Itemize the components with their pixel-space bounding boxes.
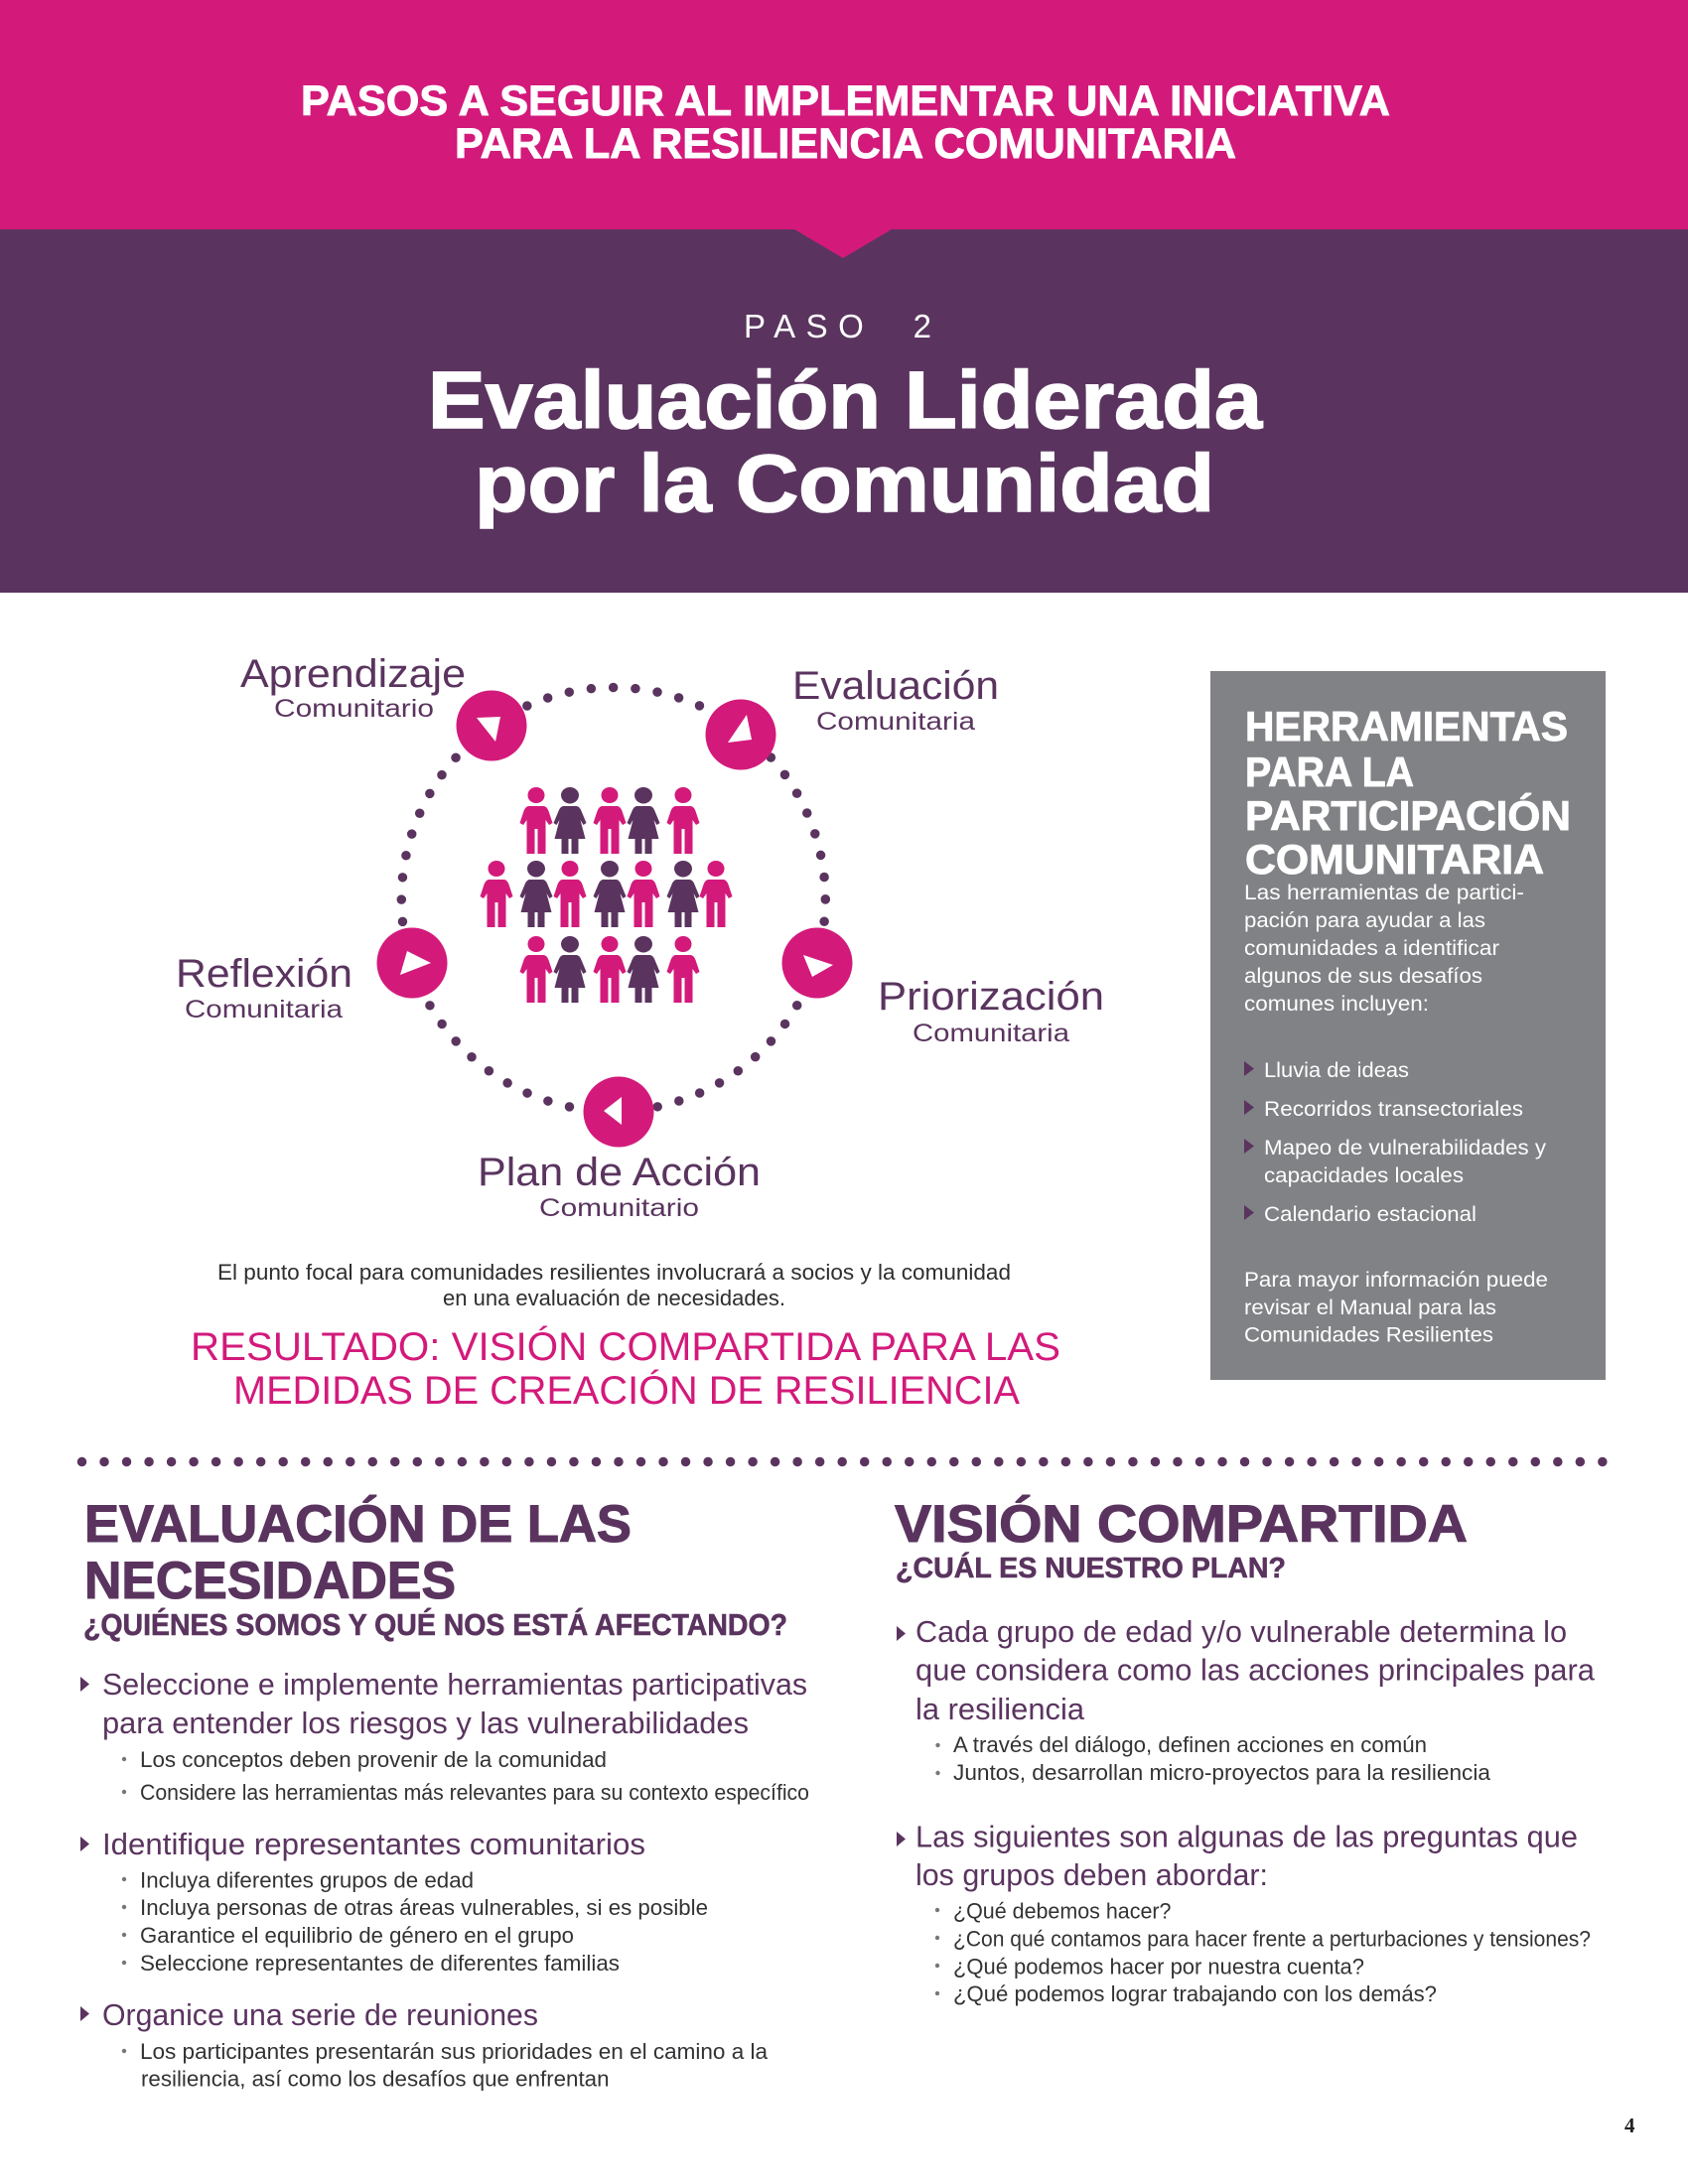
heading: herramientas	[1245, 703, 1571, 883]
callout: resultado	[191, 1324, 1060, 1413]
label: priorizacion comunitaria: Priorización	[878, 975, 1104, 1019]
list item: preguntas: ¿Qué podemos lograr trabajando con los demás?	[953, 1981, 1437, 2006]
list item: herramientas participativas	[80, 1667, 809, 1805]
list item: herramientas participativas: para entender los riesgos y las vulnerabilidades	[102, 1706, 749, 1740]
panel: purple step banner	[0, 229, 1688, 593]
list item: representantes comunitarios: Incluya personas de otras áreas vulnerables, si es posible	[140, 1895, 708, 1920]
heading: herramientas: PARA LA	[1245, 749, 1414, 795]
icon: people group	[481, 787, 733, 1003]
panel: purple step banner: por la Comunidad	[475, 439, 1214, 529]
list: tools	[1244, 1059, 1547, 1226]
list item: preguntas: ¿Qué debemos hacer?	[953, 1899, 1172, 1924]
list item: preguntas: los grupos deben abordar:	[915, 1857, 1268, 1892]
list item: preguntas	[897, 1820, 1591, 2006]
panel: purple step banner: PASO 2	[744, 308, 931, 344]
text block: tools intro	[1244, 882, 1524, 1016]
list: tools: Mapeo de vulnerabilidades y	[1264, 1137, 1547, 1160]
icon: arrow circle plan de accion	[584, 1076, 653, 1148]
text block: tools intro: Las herramientas de partici-	[1244, 882, 1524, 904]
list item: preguntas: ¿Con qué contamos para hacer frente a perturbaciones y tensiones?	[953, 1927, 1591, 1952]
text block: more information: Para mayor información puede	[1244, 1269, 1548, 1292]
label: aprendizaje comunitario: Aprendizaje	[240, 652, 466, 696]
list item: herramientas participativas: Seleccione e implemente herramientas participativas	[102, 1667, 807, 1702]
list item: serie de reuniones: Organice una serie de reuniones	[102, 1997, 538, 2032]
label: plan de accion comunitario: Plan de Acción	[478, 1151, 761, 1194]
page number: 4	[1624, 2114, 1635, 2137]
list item: serie de reuniones: resiliencia, así como los desafíos que enfrentan	[141, 2067, 610, 2092]
list item: serie de reuniones	[80, 1997, 768, 2092]
list item: serie de reuniones: Los participantes presentarán sus prioridades en el camino a la	[140, 2039, 768, 2064]
list item: acciones principales	[897, 1614, 1596, 1785]
list: tools: capacidades locales	[1264, 1164, 1464, 1187]
list item: acciones principales: Cada grupo de edad y/o vulnerable determina lo	[915, 1614, 1567, 1649]
heading: vision compartida	[895, 1494, 1468, 1584]
heading: evaluacion de las necesidades	[83, 1494, 787, 1642]
label: reflexion comunitaria: Reflexión	[176, 952, 352, 996]
panel: pink header band: PASOS A SEGUIR AL IMPLEMENTAR UNA INICIATIVA	[301, 77, 1390, 125]
icon: arrow circle priorizacion	[782, 927, 852, 999]
text block: more information	[1244, 1269, 1548, 1346]
label: priorizacion comunitaria	[878, 975, 1104, 1047]
label: evaluacion comunitaria: Comunitaria	[816, 708, 975, 736]
chart: community cycle diagram	[176, 652, 1104, 1222]
text block: focal point description: en una evaluación de necesidades.	[443, 1286, 785, 1310]
icon: arrow circle aprendizaje	[457, 691, 526, 760]
text block: tools intro: comunes incluyen:	[1244, 993, 1429, 1016]
heading: evaluacion de las necesidades: ¿QUIÉNES SOMOS Y QUÉ NOS ESTÁ AFECTANDO?	[83, 1607, 787, 1642]
panel: vision compartida	[895, 1494, 1596, 2006]
list item: acciones principales: que considera como las acciones principales para	[915, 1653, 1596, 1688]
text block: tools intro: algunos de sus desafíos	[1244, 965, 1482, 988]
list item: representantes comunitarios	[80, 1827, 708, 1976]
text block: more information: revisar el Manual para las	[1244, 1297, 1496, 1319]
label: reflexion comunitaria	[176, 952, 352, 1024]
heading: evaluacion de las necesidades: EVALUACIÓN DE LAS	[84, 1494, 632, 1554]
list item: herramientas participativas: Considere las herramientas más relevantes para su contexto específico	[140, 1780, 809, 1805]
list item: herramientas participativas: Los conceptos deben provenir de la comunidad	[140, 1747, 607, 1772]
list item: representantes comunitarios: Incluya diferentes grupos de edad	[140, 1868, 474, 1893]
panel: purple step banner: Evaluación Liderada	[428, 355, 1263, 446]
label: priorizacion comunitaria: Comunitaria	[913, 1020, 1069, 1047]
text block: tools intro: pación para ayudar a las	[1244, 909, 1485, 932]
icon: arrow circle reflexion	[377, 927, 447, 999]
list item: acciones principales: Juntos, desarrollan micro-proyectos para la resiliencia	[953, 1760, 1490, 1785]
panel: pink header band	[0, 0, 1688, 229]
label: plan de accion comunitario: Comunitario	[539, 1194, 699, 1222]
panel: herramientas para la participacion comunitaria	[1210, 671, 1606, 1380]
list item: acciones principales: A través del diálogo, definen acciones en común	[953, 1732, 1427, 1757]
panel: pink header band: PARA LA RESILIENCIA COMUNITARIA	[455, 120, 1236, 168]
heading: vision compartida: ¿CUÁL ES NUESTRO PLAN?	[896, 1551, 1286, 1584]
list: tools: Lluvia de ideas	[1264, 1059, 1409, 1082]
text block: tools intro: comunidades a identificar	[1244, 937, 1499, 960]
callout: resultado: MEDIDAS DE CREACIÓN DE RESILIENCIA	[233, 1368, 1020, 1413]
heading: herramientas: PARTICIPACIÓN	[1245, 791, 1571, 839]
label: aprendizaje comunitario	[240, 652, 466, 723]
list item: preguntas: Las siguientes son algunas de las preguntas que	[915, 1820, 1578, 1854]
list item: acciones principales: la resiliencia	[915, 1692, 1085, 1726]
heading: evaluacion de las necesidades: NECESIDADES	[84, 1552, 456, 1610]
heading: vision compartida: VISIÓN COMPARTIDA	[895, 1494, 1468, 1554]
text block: more information: Comunidades Resilientes	[1244, 1324, 1493, 1346]
label: evaluacion comunitaria	[792, 664, 999, 736]
text block: focal point description	[217, 1260, 1011, 1310]
label: plan de accion comunitario	[478, 1151, 761, 1222]
callout: resultado: RESULTADO: VISIÓN COMPARTIDA PARA LAS	[191, 1324, 1060, 1369]
heading: herramientas: HERRAMIENTAS	[1245, 703, 1568, 750]
list item: representantes comunitarios: Garantice el equilibrio de género en el grupo	[140, 1923, 574, 1948]
icon: arrow circle evaluacion	[705, 699, 776, 770]
label: reflexion comunitaria: Comunitaria	[185, 996, 343, 1024]
list item: representantes comunitarios: Identifique representantes comunitarios	[102, 1827, 645, 1861]
label: aprendizaje comunitario: Comunitario	[274, 695, 434, 723]
label: evaluacion comunitaria: Evaluación	[792, 664, 999, 708]
text block: focal point description: El punto focal para comunidades resilientes involucrará a socios y la comunidad	[217, 1260, 1011, 1285]
panel: evaluacion de las necesidades	[80, 1494, 809, 2092]
heading: herramientas: COMUNITARIA	[1245, 836, 1544, 883]
list: tools: Recorridos transectoriales	[1264, 1098, 1523, 1121]
list item: preguntas: ¿Qué podemos hacer por nuestra cuenta?	[953, 1955, 1364, 1979]
list: tools: Calendario estacional	[1264, 1203, 1477, 1226]
list item: representantes comunitarios: Seleccione representantes de diferentes familias	[140, 1951, 620, 1976]
